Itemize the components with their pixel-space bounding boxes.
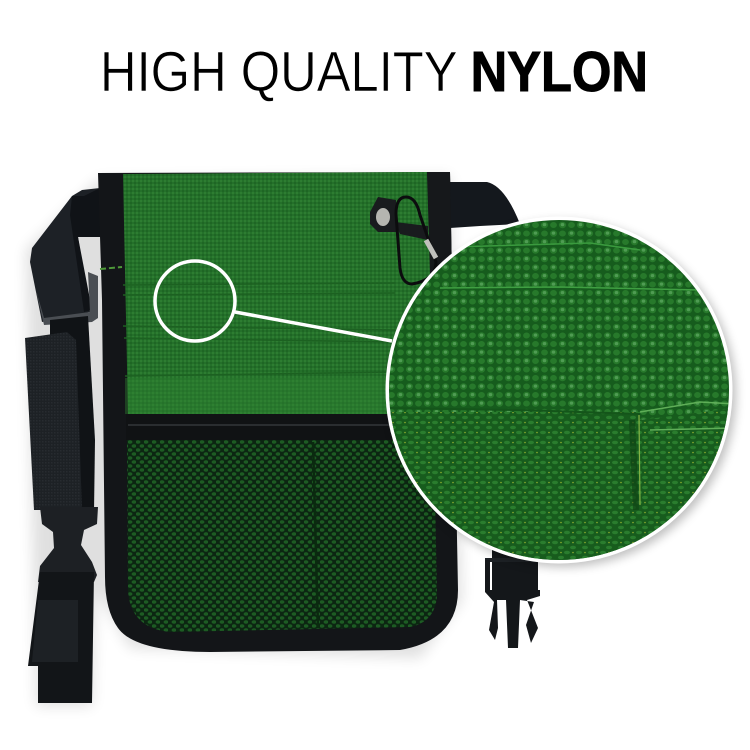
silver rivet bbox=[376, 208, 390, 226]
hook bbox=[396, 197, 436, 284]
soft drop shadow behind product bbox=[26, 176, 462, 706]
right side buckle bbox=[485, 550, 540, 648]
upper strap loop bbox=[30, 188, 100, 322]
right top webbing band bbox=[427, 172, 456, 480]
zipper band bbox=[126, 414, 394, 440]
upper green panel bbox=[123, 172, 440, 414]
circle shadow bbox=[390, 221, 736, 567]
pen pocket seams bbox=[123, 283, 395, 376]
webbing tab bbox=[395, 222, 428, 240]
side release buckle bbox=[38, 507, 98, 582]
pouch body bbox=[98, 172, 458, 652]
right waist strap bbox=[450, 182, 520, 228]
lower strap tail bbox=[28, 572, 94, 703]
webbing down to buckle bbox=[50, 316, 95, 512]
green stitch line bbox=[100, 267, 122, 269]
magnifier source circle bbox=[155, 261, 235, 341]
mesh pocket divider bbox=[313, 442, 318, 628]
strap slider bbox=[36, 272, 98, 325]
seam lines bbox=[380, 243, 735, 510]
silver pin bbox=[426, 240, 436, 258]
mesh pocket bbox=[127, 440, 437, 632]
white rim bbox=[386, 216, 732, 564]
holder bbox=[370, 197, 396, 232]
connector line bbox=[235, 312, 392, 341]
lower band shade bbox=[125, 378, 415, 414]
lower tight weave bbox=[390, 409, 728, 560]
folded lower strap bbox=[25, 332, 82, 510]
black binding bbox=[98, 172, 458, 652]
zoomed fabric circle bbox=[380, 210, 740, 570]
left strap and buckle bbox=[25, 188, 100, 703]
carabiner clip bbox=[370, 197, 436, 284]
title: HIGH QUALITY NYLON bbox=[100, 40, 648, 104]
